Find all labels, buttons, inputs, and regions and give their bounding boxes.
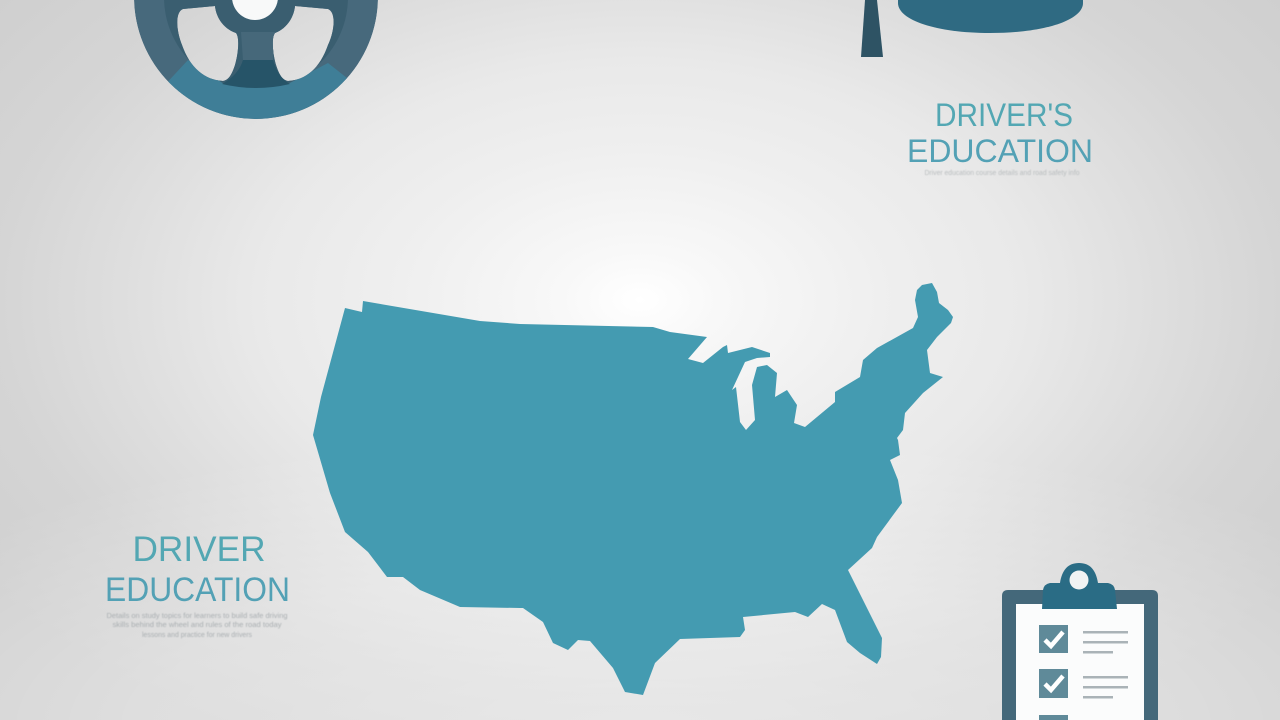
clipboard paper [1016, 604, 1144, 720]
heading: driver education: DRIVER [132, 530, 266, 569]
text block: driver education caption: Details on study topics for learners to build safe driving [106, 613, 288, 620]
steering wheel lower hub [222, 60, 290, 88]
steering wheel centre [232, 0, 278, 20]
steering wheel rim lower highlight [168, 60, 347, 119]
checklist item 3 [1039, 715, 1068, 720]
steering wheel inner hub plate [164, 0, 348, 89]
icon: clipboard checklist [1002, 563, 1158, 720]
steering wheel vertical spoke [241, 32, 275, 60]
text block: driver education caption: lessons and practice for new drivers [142, 632, 252, 639]
heading: driver's education [907, 97, 1093, 169]
heading: driver education [105, 530, 290, 609]
checklist item 1 [1039, 625, 1128, 654]
steering wheel rim [134, 0, 378, 119]
heading: driver's education: DRIVER'S [935, 97, 1073, 133]
text block: driver's education caption: Driver education course details and road safety info [924, 170, 1080, 177]
clipboard clip [1042, 563, 1117, 609]
icon: graduation cap [861, 0, 1083, 57]
text block: driver education caption [106, 613, 288, 639]
map: United States [313, 283, 953, 695]
icon: steering wheel [134, 0, 378, 119]
clipboard board [1002, 590, 1158, 720]
checklist item 2 [1039, 669, 1128, 698]
cap base [898, 0, 1083, 33]
heading: driver's education: EDUCATION [907, 133, 1093, 169]
cap tassel [861, 0, 883, 57]
heading: driver education: EDUCATION [105, 571, 290, 609]
text block: driver education caption: skills behind the wheel and rules of the road today [112, 622, 282, 629]
